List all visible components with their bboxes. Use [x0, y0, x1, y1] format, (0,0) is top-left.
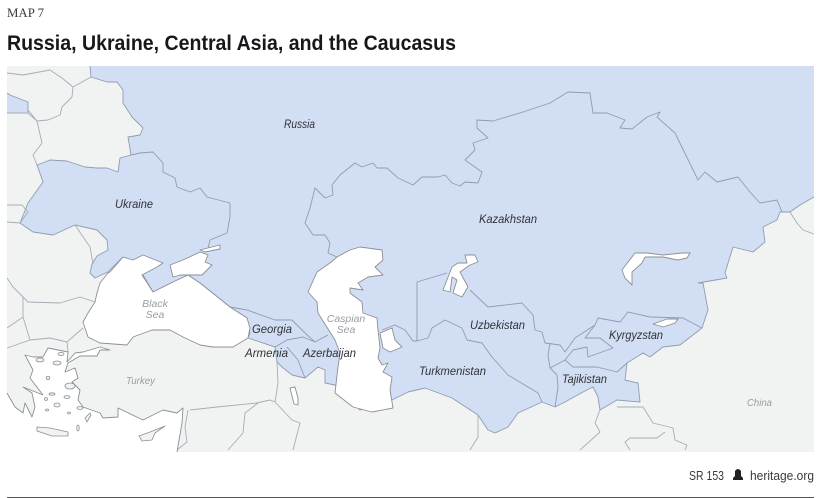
Central Asia borders	[382, 273, 702, 407]
Sea of Azov	[170, 252, 212, 277]
icon: Liberty Bell	[733, 469, 743, 480]
Issyk-Kul	[653, 319, 678, 327]
bottom rule	[7, 497, 814, 498]
label: Kazakhstan: Kazakhstan	[479, 212, 537, 226]
Caspian Sea	[308, 247, 393, 412]
Aral Sea	[443, 255, 478, 297]
map	[7, 66, 814, 452]
Black Sea	[83, 255, 250, 347]
label: Tajikistan: Tajikistan	[562, 372, 607, 386]
label: China: China	[747, 397, 772, 409]
Greek islands, Crete and Cyprus	[36, 352, 165, 441]
focus region outline	[20, 66, 814, 433]
label: Turkmenistan: Turkmenistan	[419, 364, 486, 378]
Caucasus borders	[230, 307, 328, 378]
label: Azerbaijan: Azerbaijan	[302, 346, 356, 360]
Lake Balkhash	[622, 253, 690, 285]
label: Caspian Sea: Caspian	[327, 313, 365, 325]
Russia-Ukraine border	[131, 152, 230, 248]
label: Uzbekistan: Uzbekistan	[470, 318, 525, 332]
Kara-Bogaz-Gol	[380, 328, 402, 352]
neighbouring country borders	[7, 70, 814, 450]
label: Turkey: Turkey	[126, 375, 156, 387]
label: Russia: Russia	[284, 117, 315, 131]
source: heritage.org: heritage.org	[750, 468, 814, 483]
label: Armenia: Armenia	[244, 346, 288, 360]
map label: MAP 7: MAP 7	[7, 6, 44, 20]
Lake Urmia	[290, 387, 298, 405]
label: Georgia: Georgia	[252, 322, 292, 336]
focus region: Russia, Ukraine, Central Asia, Caucasus	[20, 66, 814, 433]
Kaliningrad	[7, 93, 28, 113]
label: Black Sea: Sea	[146, 309, 164, 321]
source: SR 153: SR 153	[689, 468, 724, 483]
Mediterranean and Aegean Sea	[7, 347, 183, 452]
title: Russia, Ukraine, Central Asia, and the Caucasus	[7, 31, 456, 55]
label: Ukraine: Ukraine	[115, 197, 153, 211]
label: Kyrgyzstan: Kyrgyzstan	[609, 328, 663, 342]
Russia-Kazakhstan border and Russia-Mongolia border	[305, 92, 782, 257]
label: Caspian Sea: Sea	[337, 324, 355, 336]
Mediterranean coastline	[7, 347, 183, 452]
label: Black Sea: Black	[142, 298, 169, 310]
land background: neighbouring countries	[7, 66, 814, 452]
